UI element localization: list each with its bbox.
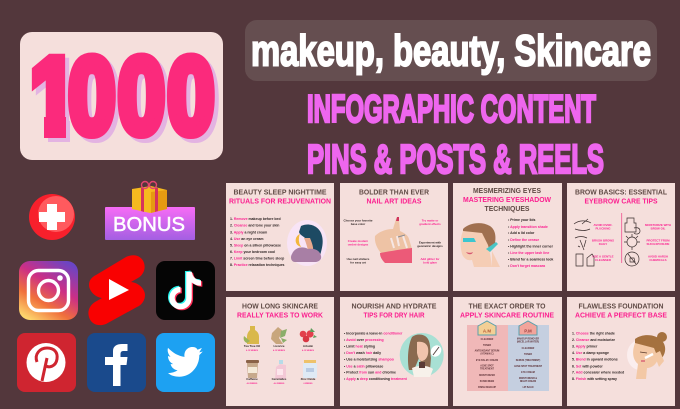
PM column: MOISTURIZER & xyxy=(519,378,537,380)
panel heading xyxy=(229,188,331,206)
left brow tips: AVOID OVER- xyxy=(594,223,612,227)
nail tips left: base color xyxy=(351,222,366,226)
item: tea tree oil: 6-12 WEEKS xyxy=(246,350,259,352)
hair tip list: • Avoid over processing xyxy=(344,338,384,342)
right brow tips xyxy=(645,223,671,262)
right brow tips: AVOID HARSH xyxy=(648,254,668,258)
right brow tips: SUN EXPOSURE xyxy=(647,242,670,246)
nail tips right: Try matte or xyxy=(422,218,439,222)
panel: nail art xyxy=(340,183,448,291)
left brow icons xyxy=(574,219,594,266)
panel heading: BEAUTY SLEEP NIGHTTIME xyxy=(234,188,327,196)
illustration: woman applying foundation xyxy=(627,332,667,379)
nail tips left: ombré designs xyxy=(348,242,369,246)
nail tips left xyxy=(344,218,373,264)
right brow tips: CHEMICALS xyxy=(649,258,667,262)
item: caffeine: 4-8 WEEKS xyxy=(247,382,258,385)
foundation step list: 1. Choose the right shade xyxy=(572,332,615,336)
icon: bonus gift banner: BONUS xyxy=(113,214,185,236)
illustration: hand with nails xyxy=(375,217,412,263)
hair tip list: • Don't wash hair daily xyxy=(344,351,381,355)
nail tips left: Create modern xyxy=(348,239,368,243)
badge: 1000: 000 xyxy=(68,35,214,156)
icon: twitter xyxy=(156,333,215,392)
ritual list xyxy=(230,217,285,267)
hair tip list: • Use a moisturizing shampoo xyxy=(344,358,394,362)
AM column: (VITAMIN C) xyxy=(480,352,494,356)
panel heading: BOLDER THAN EVER xyxy=(359,188,430,196)
PM column: (MICELLAR WATER) xyxy=(517,340,539,344)
illustration: woman with dry hair xyxy=(400,333,444,377)
left brow tips: BRUSH BROWS xyxy=(592,238,614,242)
badge: 1000: 1 xyxy=(30,35,77,156)
badge: 1000: 1 xyxy=(34,39,81,160)
panel heading: NOURISH AND HYDRATE xyxy=(352,302,437,310)
left brow tips: PLUCKING xyxy=(595,226,611,230)
item: ceramides xyxy=(272,360,287,385)
panel heading: TECHNIQUES xyxy=(484,204,530,213)
panel: eyebrow care xyxy=(567,183,675,291)
right brow icons xyxy=(624,218,640,266)
badge: 1000 xyxy=(20,32,223,160)
panel heading: REALLY TAKES TO WORK xyxy=(237,310,324,320)
panel heading: HOW LONG SKINCARE xyxy=(242,302,318,310)
panel heading: NAIL ART IDEAS xyxy=(366,196,422,206)
icon: pinterest xyxy=(17,333,76,392)
item: licorice: Licorice xyxy=(273,344,285,348)
panel heading: MESMERIZING EYES xyxy=(473,186,541,195)
technique list: • Add a lid color xyxy=(508,231,535,235)
PM column: ACNE SPOT TREATMENT xyxy=(514,365,543,368)
AM column: TONER xyxy=(483,345,491,347)
AM column: EYE BALM / CREAM xyxy=(476,359,498,362)
panel: dry hair xyxy=(340,297,448,406)
technique list: • Apply transition shade xyxy=(508,225,548,229)
panel heading xyxy=(237,302,324,320)
icon: facebook xyxy=(87,333,146,392)
PM column: NIGHT CREAM xyxy=(520,380,536,383)
item: tea tree oil: Tea Tree Oil xyxy=(244,344,260,348)
panel heading: RITUALS FOR REJUVENATION xyxy=(229,196,331,206)
item: zinc oxide xyxy=(301,360,317,385)
item: arbutin: 4-12 WEEKS xyxy=(302,349,315,352)
panel heading: EYEBROW CARE TIPS xyxy=(584,196,658,206)
AM column: FINISH MAKEUP xyxy=(478,386,497,389)
panel heading xyxy=(359,188,430,206)
AM column: ANTIOXIDANT SERUM xyxy=(475,350,499,352)
AM column: TREATMENT xyxy=(480,368,495,370)
icon: bonus gift banner xyxy=(105,182,195,240)
foundation step list: 8. Finish with setting spray xyxy=(572,377,617,381)
PM column: TONER xyxy=(524,354,532,356)
panel heading xyxy=(463,186,551,213)
panel heading xyxy=(460,302,554,320)
ritual list: 3. Apply a night cream xyxy=(230,230,267,234)
panel heading xyxy=(575,302,667,320)
ritual list: 7. Limit screen time before sleep xyxy=(230,256,284,260)
PM column: LIP BALM xyxy=(523,386,533,389)
nail tips right: Add glitter for xyxy=(420,257,440,261)
foundation step list xyxy=(572,332,624,381)
technique list: • Blend for a seamless look xyxy=(508,257,553,261)
item: ceramides: Ceramides xyxy=(272,377,287,381)
item: ceramides: 4-6 WEEKS xyxy=(274,382,285,385)
ritual list: 2. Cleanse and tone your skin xyxy=(230,224,279,228)
left brow tips: USE A GENTLE xyxy=(592,254,614,258)
foundation step list: 7. Add concealer where needed xyxy=(572,371,624,375)
foundation step list: 6. Set with powder xyxy=(572,364,603,368)
item: licorice xyxy=(271,327,287,352)
AM column: ACNE SPOT xyxy=(480,364,494,368)
hair tip list: • Protect from sun and chlorine xyxy=(344,371,396,375)
panel: beauty sleep xyxy=(226,183,334,291)
right brow tips: BROW OIL xyxy=(651,226,666,230)
PM column: SERUM (TREATMENT) xyxy=(516,359,540,362)
technique list: • Line the upper lash line xyxy=(508,251,549,255)
panel heading: THE EXACT ORDER TO xyxy=(468,302,546,310)
ritual list: 4. Use an eye cream xyxy=(230,237,263,241)
item: arbutin xyxy=(300,328,317,352)
panel heading: BROW BASICS: ESSENTIAL xyxy=(575,188,668,196)
panel: flawless foundation xyxy=(567,297,675,406)
technique list xyxy=(508,218,554,268)
panel heading: FLAWLESS FOUNDATION xyxy=(578,302,664,310)
nail tips left: for easy art xyxy=(350,260,366,264)
item: zinc oxide: Zinc Oxide xyxy=(301,377,316,381)
item: licorice: 4-12 WEEKS xyxy=(273,349,286,352)
panel heading: ACHIEVE A PERFECT BASE xyxy=(575,310,667,320)
nail tips left: Choose your favorite xyxy=(344,218,373,222)
AM column: MOISTURIZER xyxy=(479,375,495,377)
panel: skincare routine xyxy=(453,297,562,406)
badge: 1000: 000 xyxy=(72,39,218,160)
foundation step list: 4. Use a damp sponge xyxy=(572,351,609,355)
right brow tips: PROTECT FROM xyxy=(646,238,670,242)
item: caffeine xyxy=(246,360,259,385)
panel: eyeshadow xyxy=(453,183,562,291)
panel heading xyxy=(575,188,668,206)
foundation step list: 2. Cleanse and moisturize xyxy=(572,338,615,342)
AM column: CLEANSER xyxy=(481,338,494,341)
AM column: SUNSCREEN xyxy=(480,381,495,383)
panel heading: TIPS FOR DRY HAIR xyxy=(364,310,425,320)
icon: tiktok xyxy=(156,261,215,320)
ritual list: 8. Practice relaxation techniques xyxy=(230,263,285,267)
AM column: A.M xyxy=(483,328,491,334)
PM column: CLEANSER xyxy=(522,347,535,350)
panel heading xyxy=(352,302,437,320)
item: tea tree oil xyxy=(244,326,260,352)
column divider xyxy=(621,213,623,263)
PM column: P.M xyxy=(524,328,532,334)
PM column: MAKEUP REMOVER xyxy=(517,338,539,340)
illustration: sleeping woman xyxy=(287,220,327,266)
technique list: • Define the crease xyxy=(508,238,539,242)
item: zinc oxide: 6 WEEKS xyxy=(303,383,313,385)
icon: instagram xyxy=(19,261,78,320)
nail tips right: geometric designs xyxy=(417,244,443,248)
illustration: eyeshadow face xyxy=(461,223,500,267)
nail tips right xyxy=(417,218,443,264)
ritual list: 6. Keep your bedroom cool xyxy=(230,250,275,254)
technique list: • Highlight the inner corner xyxy=(508,244,554,248)
left brow tips: DAILY xyxy=(599,242,607,246)
PM column: EYE CREAM xyxy=(521,371,535,374)
right brow tips: MOISTURIZE WITH xyxy=(645,223,671,227)
left brow tips xyxy=(592,223,614,262)
hair tip list: • Apply a deep conditioning treatment xyxy=(344,377,408,381)
PM column xyxy=(508,321,549,391)
left brow tips: CLEANSER xyxy=(595,258,612,262)
hair tip list: • Incorporate a leave-in conditioner xyxy=(344,332,403,336)
panel heading: MASTERING EYESHADOW xyxy=(463,195,551,204)
nail tips right: Experiment with xyxy=(419,240,441,244)
technique list: • Don't forget mascara xyxy=(508,264,545,268)
item: arbutin: Arbutin xyxy=(303,344,313,348)
icon: youtube shorts xyxy=(88,255,145,325)
ritual list: 1. Remove makeup before bed xyxy=(230,217,281,221)
item: caffeine: Caffeine xyxy=(246,377,258,381)
hair tip list xyxy=(344,332,408,381)
nail tips right: bold glam xyxy=(423,260,437,264)
nail tips right: gradient effects xyxy=(419,222,441,226)
hair tip list: • Limit heat styling xyxy=(344,344,375,348)
nail tips left: Use nail stickers xyxy=(347,257,370,261)
hair tip list: • Use a satin pillowcase xyxy=(344,364,383,368)
panel heading: APPLY SKINCARE ROUTINE xyxy=(460,310,554,320)
foundation step list: 5. Blend in upward motions xyxy=(572,358,618,362)
icon: plus xyxy=(29,194,75,240)
panel: skincare timeline xyxy=(226,297,334,406)
technique list: • Prime your lids xyxy=(508,218,536,222)
foundation step list: 3. Apply primer xyxy=(572,344,598,348)
ritual list: 5. Sleep on a silken pillowcase xyxy=(230,244,281,248)
AM column xyxy=(467,321,508,391)
